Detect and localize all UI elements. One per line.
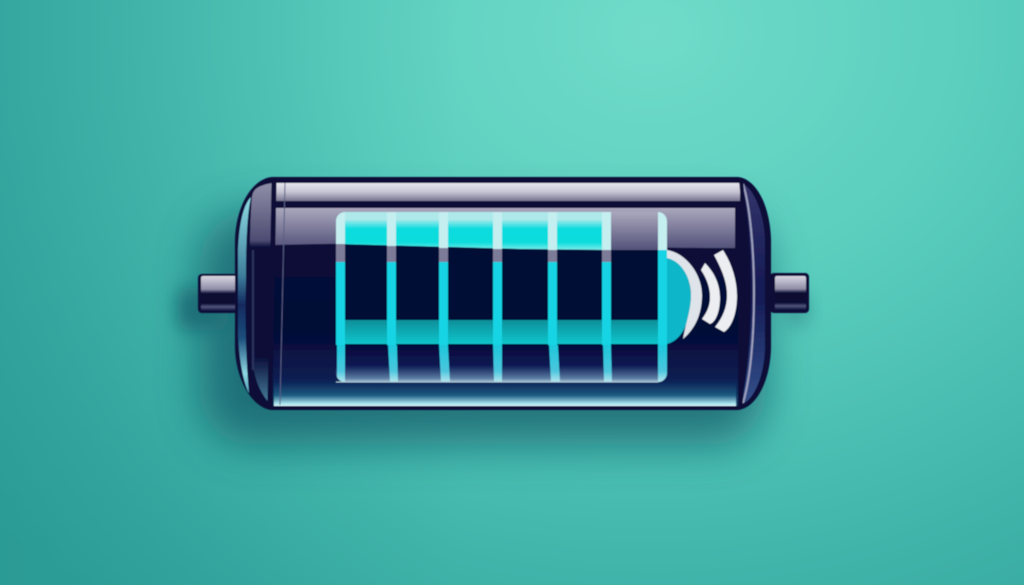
charge panel [336, 212, 667, 382]
drop shadow [178, 212, 809, 444]
tip fill [667, 254, 691, 344]
battery tip with signal arcs [667, 250, 737, 344]
inner arc [667, 250, 702, 339]
horizontal teal band [336, 320, 667, 344]
cyan charge cells top [336, 220, 610, 250]
lower reflection band [274, 382, 736, 406]
battery casing [235, 177, 771, 410]
separator line right [740, 181, 745, 406]
middle arc [701, 263, 720, 324]
top highlight band [274, 183, 740, 201]
right end cap [741, 183, 765, 404]
left terminal [198, 274, 238, 313]
vertical bars [336, 212, 667, 382]
lower section [336, 345, 667, 382]
outer arc [714, 250, 737, 332]
panel bright edge [336, 381, 658, 383]
left end cap [238, 183, 272, 405]
main body [273, 181, 738, 406]
right terminal [770, 273, 809, 313]
panel fill [336, 212, 667, 382]
casing outline [235, 177, 771, 410]
upper gloss [274, 208, 735, 248]
separator line left [270, 183, 274, 405]
